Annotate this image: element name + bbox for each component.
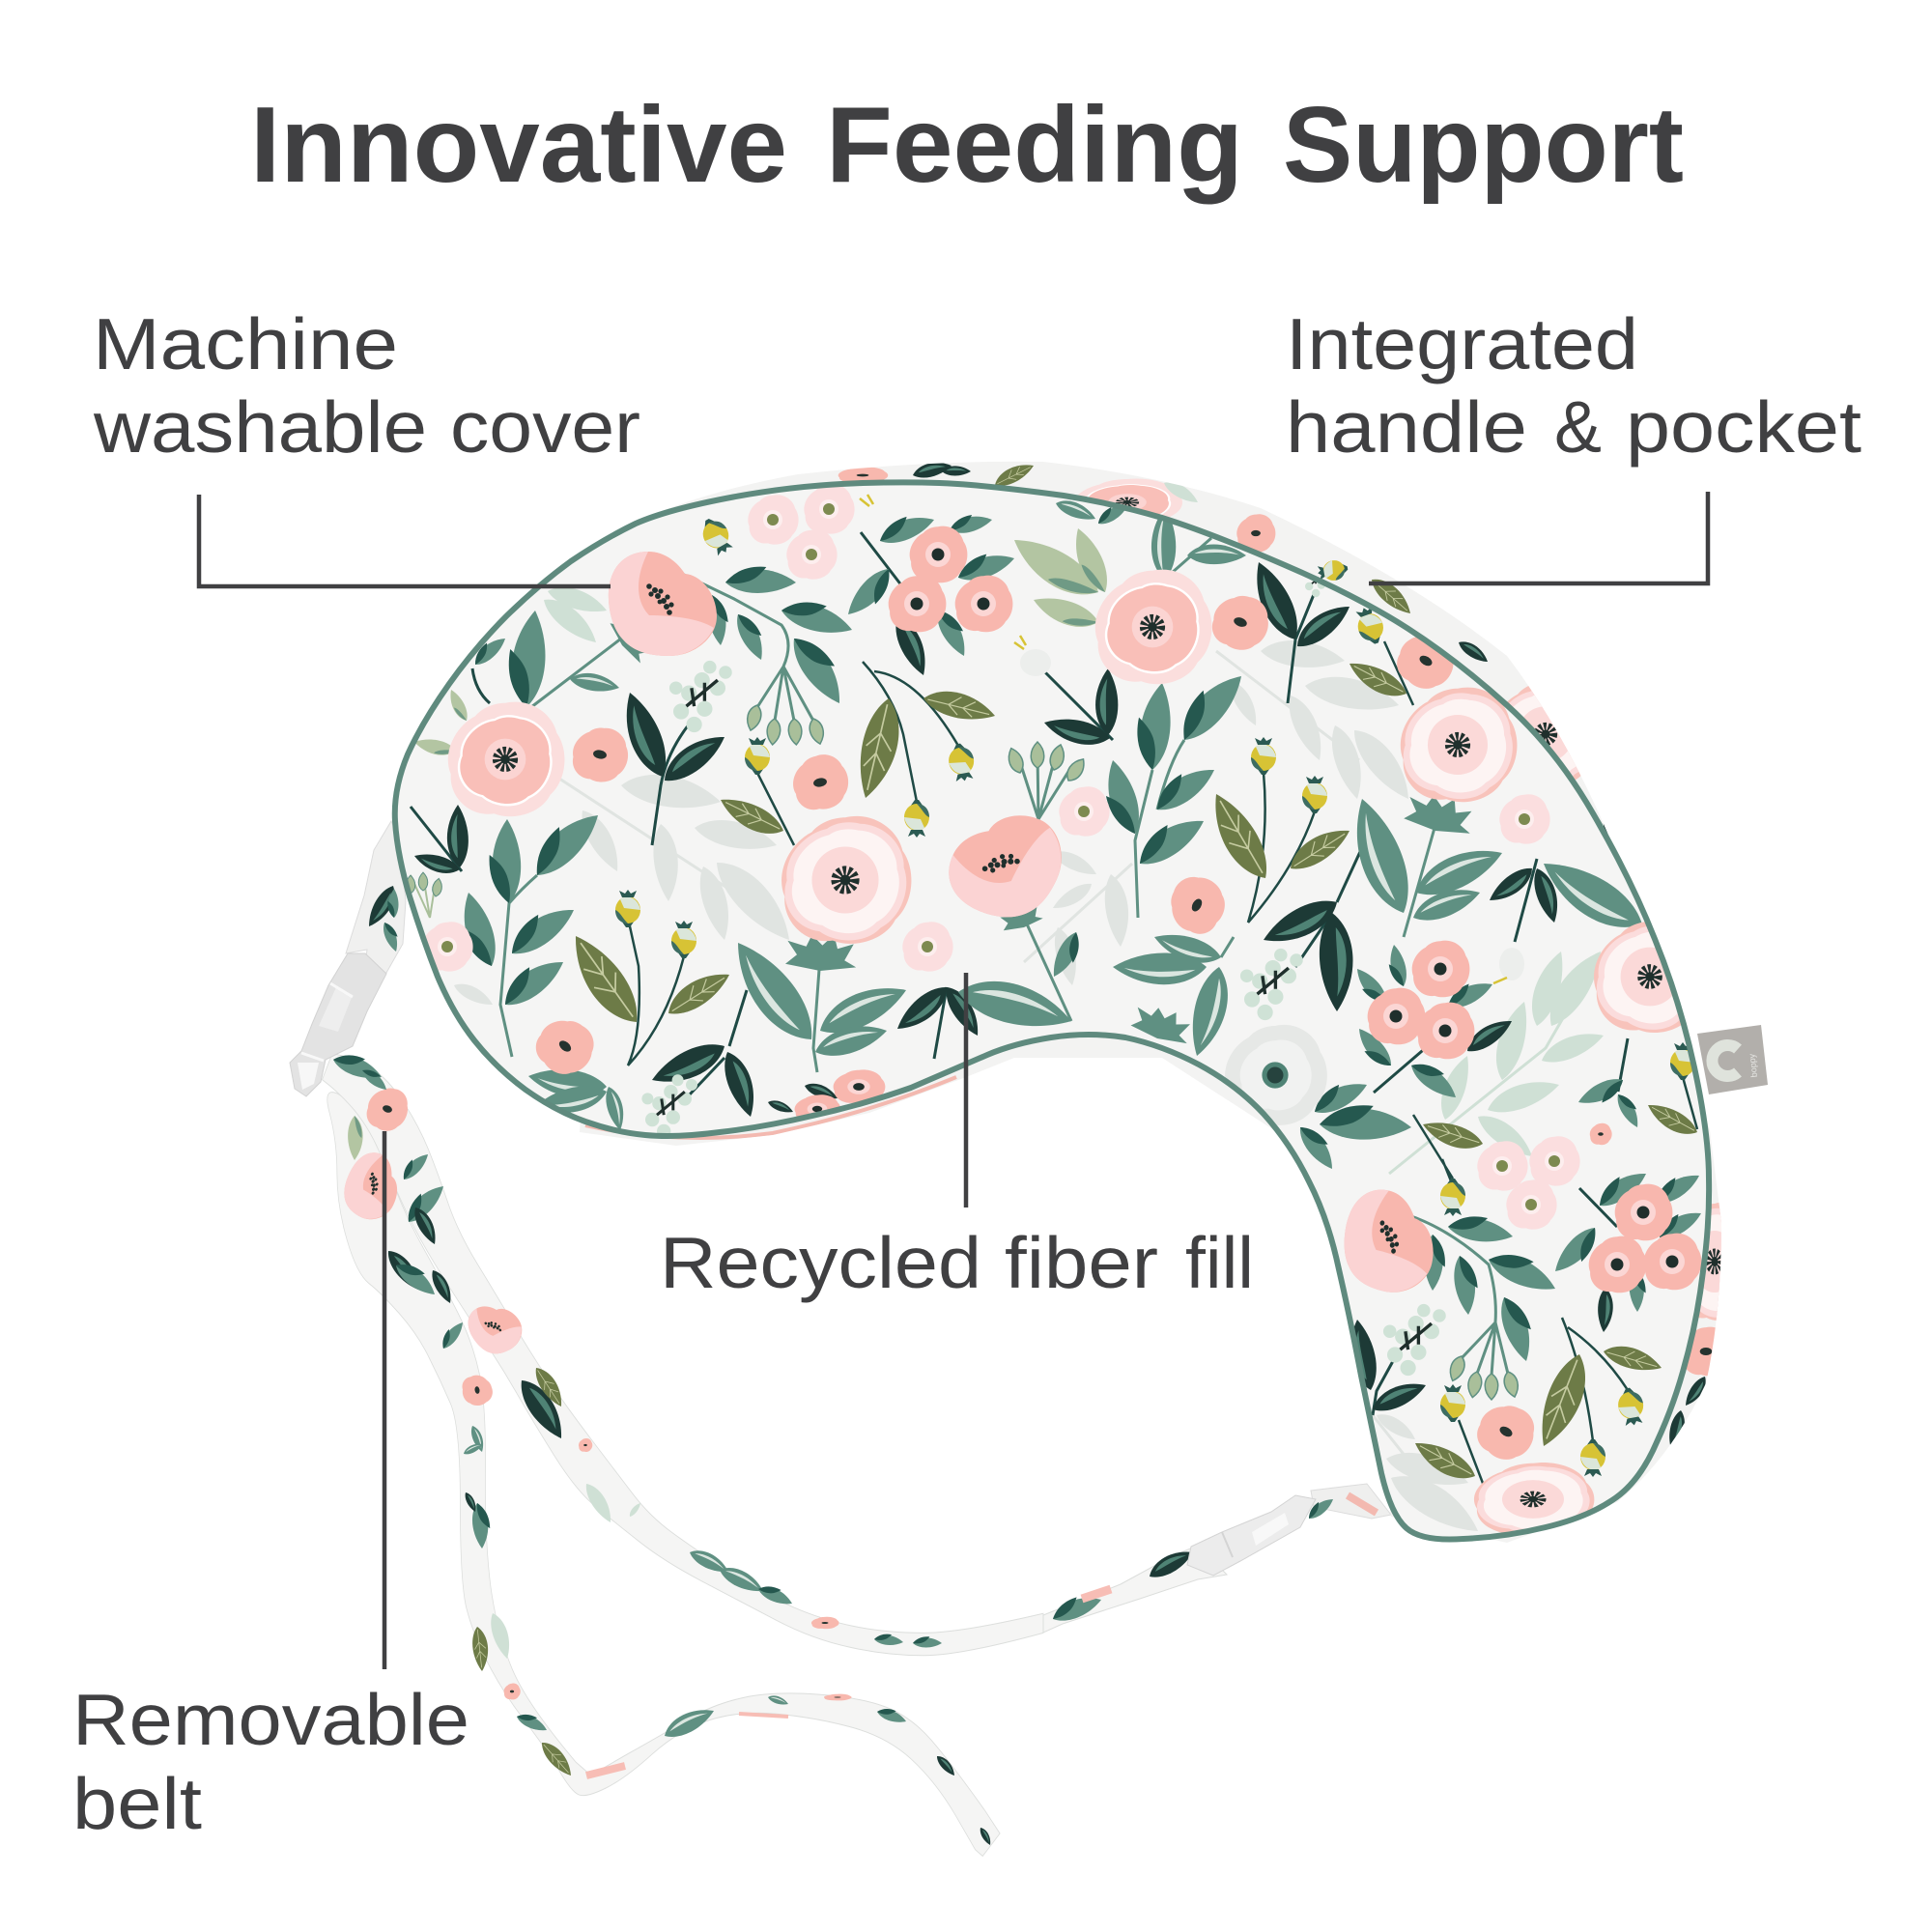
belt print bbox=[330, 1049, 1197, 1847]
label: integrated handle and pocket: handle bbox=[1286, 386, 1527, 468]
label: machine washable cover: cover bbox=[450, 386, 640, 468]
flowers bbox=[422, 484, 1716, 1541]
stems bbox=[411, 532, 1697, 1486]
right tab bbox=[1305, 1484, 1391, 1522]
pillow front panel bbox=[395, 482, 1709, 1540]
leader line: removable belt bbox=[383, 1131, 386, 1669]
floral print bbox=[406, 484, 1716, 1543]
label: recycled fiber fill: Recycled bbox=[660, 1222, 981, 1303]
brand tag bbox=[1697, 1025, 1768, 1094]
belt bbox=[290, 821, 1391, 1856]
brand tag: boppy bbox=[1747, 1053, 1759, 1078]
pillow bbox=[395, 458, 1768, 1543]
label: machine washable cover bbox=[93, 303, 640, 468]
title: Innovative bbox=[250, 85, 787, 205]
green and dark leaves bbox=[412, 496, 1705, 1488]
leader line: recycled fiber fill bbox=[964, 973, 968, 1208]
label: machine washable cover: washable bbox=[93, 386, 427, 468]
label: machine washable cover: Machine bbox=[93, 303, 398, 384]
small buds and calyxes bbox=[406, 495, 1695, 1477]
leader line: integrated handle and pocket bbox=[1369, 492, 1708, 583]
label: integrated handle and pocket: pocket bbox=[1626, 386, 1861, 468]
back fabric bbox=[580, 458, 1763, 1543]
label: recycled fiber fill: fill bbox=[1185, 1222, 1254, 1303]
piping bbox=[395, 482, 1709, 1540]
strap to right buckle bbox=[1043, 1546, 1227, 1633]
title bbox=[250, 85, 1684, 205]
right buckle bbox=[1187, 1495, 1316, 1576]
title: Support bbox=[1283, 85, 1684, 205]
left buckle bbox=[290, 953, 386, 1096]
leader line: machine washable cover bbox=[199, 495, 611, 586]
belt straps bbox=[323, 1054, 1043, 1856]
label: integrated handle and pocket bbox=[1286, 303, 1861, 468]
label: integrated handle and pocket: & bbox=[1554, 386, 1602, 468]
label: removable belt: Removable bbox=[72, 1679, 469, 1760]
label: recycled fiber fill bbox=[660, 1222, 1254, 1303]
label: integrated handle and pocket: Integrated bbox=[1286, 303, 1638, 384]
label: removable belt: belt bbox=[72, 1763, 202, 1844]
ghost and mint background leaves bbox=[451, 581, 1610, 1543]
upper belt tab at left bbox=[346, 821, 406, 973]
label: removable belt bbox=[72, 1679, 469, 1844]
label: recycled fiber fill: fiber bbox=[1005, 1222, 1158, 1303]
title: Feeding bbox=[826, 85, 1243, 205]
